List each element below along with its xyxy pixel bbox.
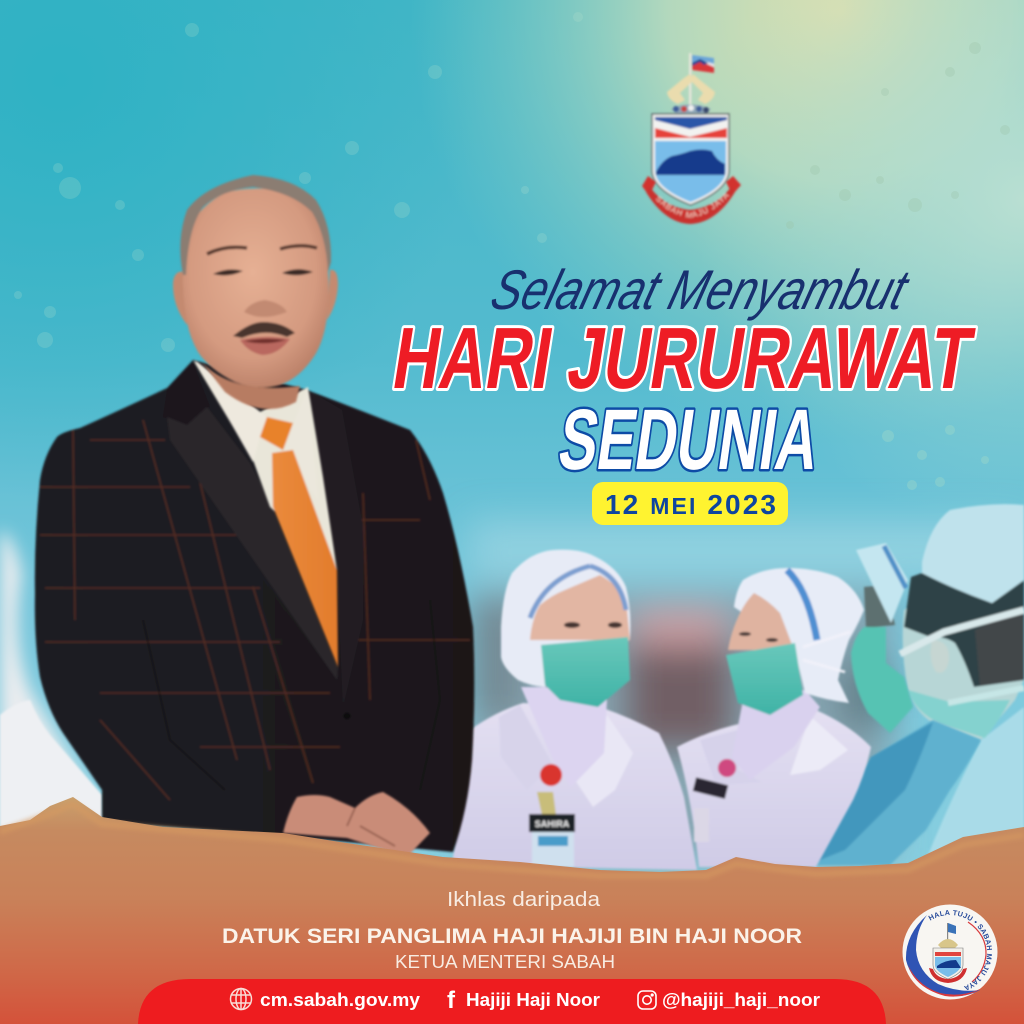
blurred photo backdrop behind nurses xyxy=(0,520,1024,860)
nurse one xyxy=(452,550,697,870)
nurse three xyxy=(805,543,981,865)
date pill: 12 MEI 2023 xyxy=(605,489,776,520)
facebook name: Hajiji Haji Noor xyxy=(466,989,600,1010)
man: head xyxy=(173,175,338,409)
man: suit jacket xyxy=(35,360,474,852)
man: shirt and tie xyxy=(193,360,338,667)
crest motto ribbon: SABAH MAJU JAYA xyxy=(654,192,730,220)
icon: facebook: f xyxy=(447,987,456,1014)
instagram handle: @hajiji_haji_noor xyxy=(662,989,820,1010)
background nurse on the left xyxy=(0,700,102,830)
Sabah state crest xyxy=(640,52,742,226)
crest arms and wreath xyxy=(667,74,715,113)
contact bar xyxy=(138,979,886,1024)
man: clasped hands xyxy=(283,792,430,857)
sender line: Ikhlas daripada xyxy=(447,889,601,911)
icon: instagram xyxy=(638,991,656,1009)
icon: globe xyxy=(230,988,252,1010)
nurse four, right foreground xyxy=(900,504,1024,860)
crest motto ribbon xyxy=(640,175,742,226)
subtitle: SEDUNIA xyxy=(553,392,825,488)
circular badge xyxy=(902,904,998,1000)
crest flag and pole xyxy=(689,53,714,105)
sender name: DATUK SERI PANGLIMA HAJI HAJIJI BIN HAJI NOOR xyxy=(222,925,802,948)
nurse one: SAHIRA xyxy=(535,819,570,829)
script heading: Selamat Menyambut xyxy=(484,259,916,322)
sender title: KETUA MENTERI SABAH xyxy=(395,952,615,972)
nurse two xyxy=(677,568,871,867)
date pill xyxy=(592,482,788,525)
circular badge: HALA TUJU • SABAH MAJU JAYA xyxy=(928,910,992,990)
torn earth footer band xyxy=(0,797,1024,1024)
website: cm.sabah.gov.my xyxy=(260,989,421,1010)
badge crest xyxy=(929,923,967,983)
crest shield xyxy=(652,114,729,205)
